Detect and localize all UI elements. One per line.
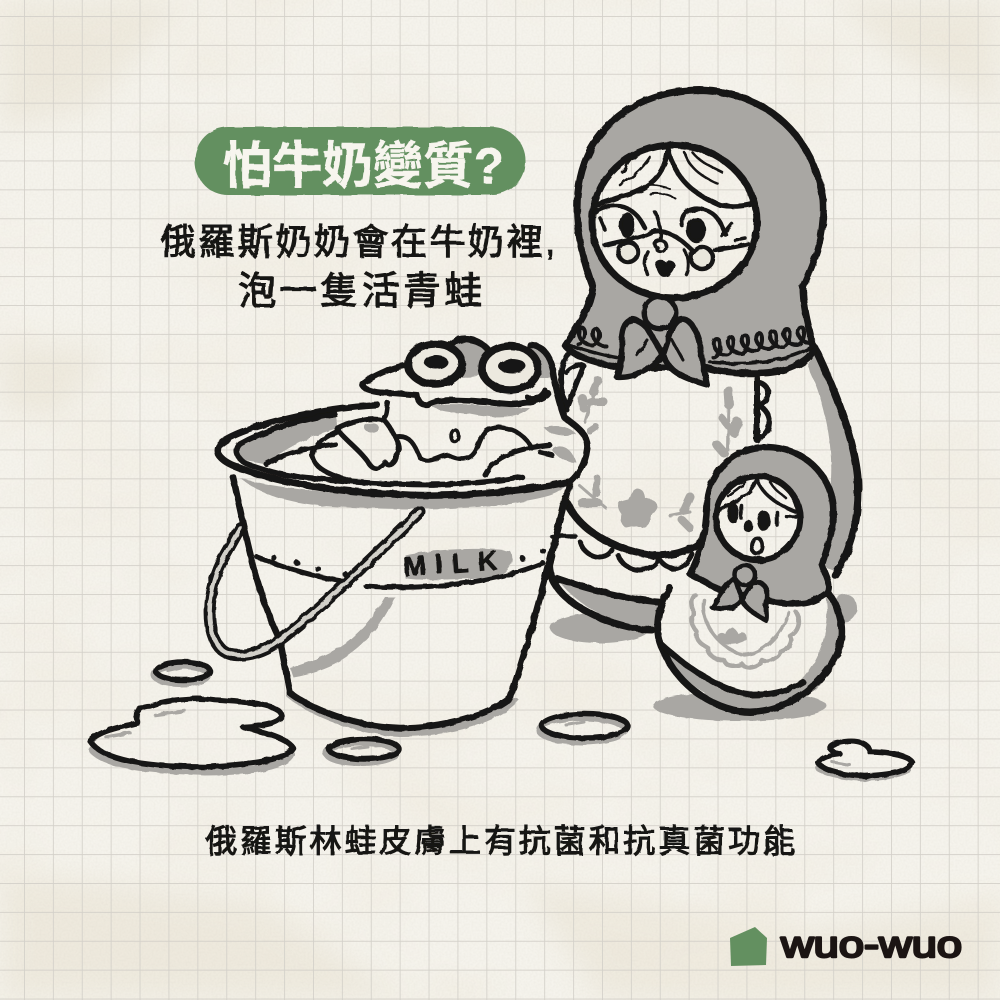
cape trim loops [568, 327, 815, 363]
subtitle text [160, 221, 555, 313]
small doll hood with face cutout [690, 447, 833, 604]
puddle centre right [539, 714, 628, 742]
apron and body outlines [549, 348, 858, 630]
headscarf hood with face cutout [565, 90, 823, 373]
subtitle text: 泡一隻活青蛙 [238, 271, 482, 313]
frog outlines [313, 339, 587, 482]
puddle large [90, 699, 293, 772]
doll body shading [555, 350, 855, 631]
small doll shading [663, 597, 839, 705]
apron floral pattern [580, 378, 737, 528]
bucket shading [234, 414, 565, 677]
logo [730, 924, 962, 966]
bucket handle [210, 512, 420, 655]
bucket band rivets [271, 548, 546, 577]
caption: 俄羅斯林蛙皮膚上有抗菌和抗真菌功能 [205, 823, 795, 859]
MILK label: MILK [402, 545, 499, 582]
small doll neck scarf [712, 565, 767, 620]
illustration [90, 90, 912, 778]
neck scarf [617, 297, 707, 385]
title banner: 怕牛奶變質? [222, 138, 504, 194]
small matryoshka doll [658, 447, 842, 712]
frog shading [364, 340, 576, 462]
frog eyes [408, 344, 538, 390]
ground shadows [288, 594, 857, 735]
milk bucket [210, 405, 570, 728]
bucket outlines [218, 405, 570, 728]
icon: green house [730, 927, 767, 966]
subtitle text: 俄羅斯奶奶會在牛奶裡, [160, 221, 555, 262]
puddle centre left [326, 739, 399, 763]
small doll body [658, 588, 842, 712]
puddle right [818, 741, 912, 778]
small doll apron [691, 595, 799, 667]
puddle small top left [154, 662, 210, 684]
wordmark: wuo-wuo [780, 924, 962, 965]
grandmother matryoshka doll [549, 90, 858, 631]
small doll face [720, 478, 798, 554]
milk puddles [90, 662, 912, 778]
face details [595, 148, 755, 275]
frog in the bucket [313, 339, 587, 482]
